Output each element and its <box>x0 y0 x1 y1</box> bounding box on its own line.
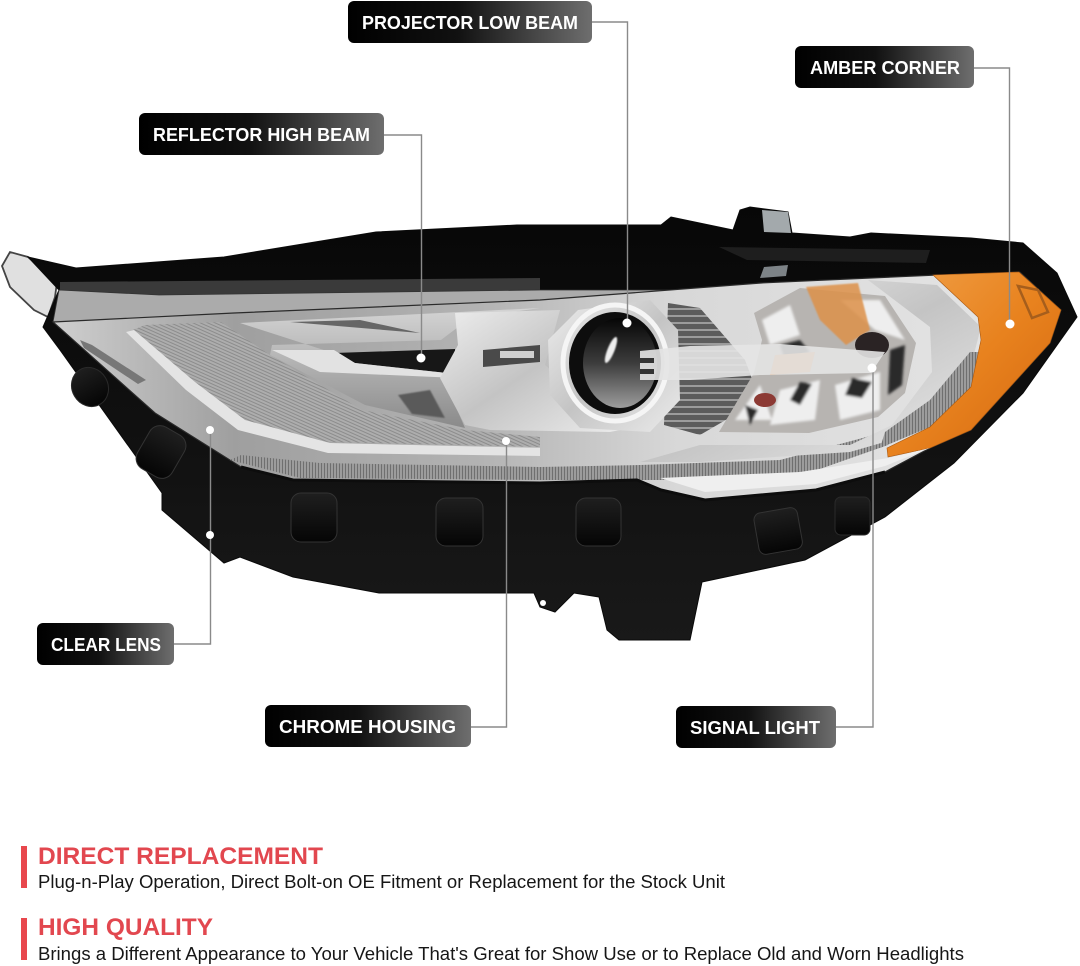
bulb shadow <box>855 332 889 358</box>
marker dot <box>868 364 876 372</box>
mounting clip 7 <box>835 497 870 535</box>
red reflection <box>754 393 776 407</box>
mounting clip 6 <box>753 506 803 555</box>
projector dark ring <box>569 312 661 414</box>
chrome U band <box>640 280 981 462</box>
marker dot <box>416 354 426 362</box>
mounting clip 1 <box>64 361 116 413</box>
label text: AMBER CORNER <box>810 57 960 78</box>
dark shards <box>745 340 905 425</box>
label tag <box>676 706 836 748</box>
lower lens edge <box>241 467 885 500</box>
leader line <box>384 135 422 358</box>
grey ribbed sector <box>664 303 760 435</box>
label tag <box>139 113 384 155</box>
chrome trim highlight <box>500 351 534 358</box>
lower ribbed lens strip <box>230 432 888 480</box>
lower chrome trim <box>660 448 930 492</box>
feature: direct replacement <box>21 843 725 892</box>
metal connector <box>762 210 791 233</box>
upper dark gloss band <box>60 278 540 295</box>
black housing body <box>28 207 1077 640</box>
chrome centre reflector <box>440 310 620 432</box>
mounting clip 3 <box>291 493 337 542</box>
top clear lens strip <box>53 272 1061 340</box>
callout: chrome housing <box>265 437 510 747</box>
leader line <box>836 368 873 727</box>
projector highlight <box>603 336 619 364</box>
leader line <box>174 430 210 644</box>
marker dot <box>502 437 510 445</box>
leader line <box>974 68 1010 324</box>
amber corner lens <box>887 272 1061 457</box>
label tag <box>795 46 974 88</box>
mounting bracket bolt hole <box>540 600 546 606</box>
upper reflector dark streak <box>290 320 420 333</box>
clear mounting tab <box>2 252 57 317</box>
label text: CLEAR LENS <box>51 634 161 655</box>
grey reflector strip <box>880 352 988 448</box>
daytime light strip <box>126 330 540 456</box>
amber reflector patches <box>806 283 870 345</box>
reflector chrome lip <box>272 350 458 378</box>
callout: projector low beam <box>348 1 632 328</box>
clear light guide bar <box>640 344 885 380</box>
marker dot <box>622 318 632 328</box>
callout: amber corner <box>795 46 1014 328</box>
label text: REFLECTOR HIGH BEAM <box>153 124 370 145</box>
headlight assembly <box>2 207 1077 640</box>
white shards <box>735 300 905 425</box>
reflector lower bulb reflection <box>398 390 445 418</box>
heading: HIGH QUALITY <box>38 914 213 941</box>
signal reflector chamber <box>719 288 916 433</box>
mounting clip 4 <box>436 498 483 546</box>
label text: SIGNAL LIGHT <box>690 717 821 738</box>
signal reflector shards <box>735 300 905 425</box>
description: Plug-n-Play Operation, Direct Bolt-on OE Fitment or Replacement for the Stock Unit <box>38 872 725 892</box>
amber corner detail <box>1018 286 1048 318</box>
heading: DIRECT REPLACEMENT <box>38 843 323 870</box>
glossy upper trim <box>719 247 930 263</box>
feature: high quality <box>21 914 964 964</box>
callout: reflector high beam <box>139 113 426 362</box>
ribbed inner lens panel <box>128 322 540 447</box>
mounting clip 2 <box>132 421 190 483</box>
speckled lens edge <box>80 340 146 384</box>
label tag <box>265 705 471 747</box>
main lens <box>53 272 1061 500</box>
leader line <box>471 441 506 727</box>
leader line <box>592 22 628 323</box>
mounting clip 5 <box>576 498 621 546</box>
metal clip <box>760 265 788 278</box>
label tag <box>348 1 592 43</box>
upper reflector <box>240 308 540 428</box>
marker dot on tab <box>206 531 214 539</box>
label tag <box>37 623 174 665</box>
projector lens sphere <box>583 318 657 408</box>
projector inner ring highlight <box>563 305 667 421</box>
light guide prongs <box>640 358 654 374</box>
callout: signal light <box>676 364 876 748</box>
description: Brings a Different Appearance to Your Vehicle That's Great for Show Use or to Replace Old and Worn Headlights <box>38 944 964 964</box>
red accent bar <box>21 846 27 888</box>
chrome trim bar <box>483 345 540 367</box>
red accent bar <box>21 918 27 960</box>
marker dot <box>1006 320 1014 328</box>
label text: PROJECTOR LOW BEAM <box>362 12 578 33</box>
projector chrome ring <box>548 300 680 432</box>
label text: CHROME HOUSING <box>279 716 456 737</box>
callout: clear lens <box>37 426 214 665</box>
marker dot on lens <box>206 426 214 434</box>
reflector high beam dark slot <box>334 349 456 374</box>
signal amber patch <box>770 352 815 375</box>
